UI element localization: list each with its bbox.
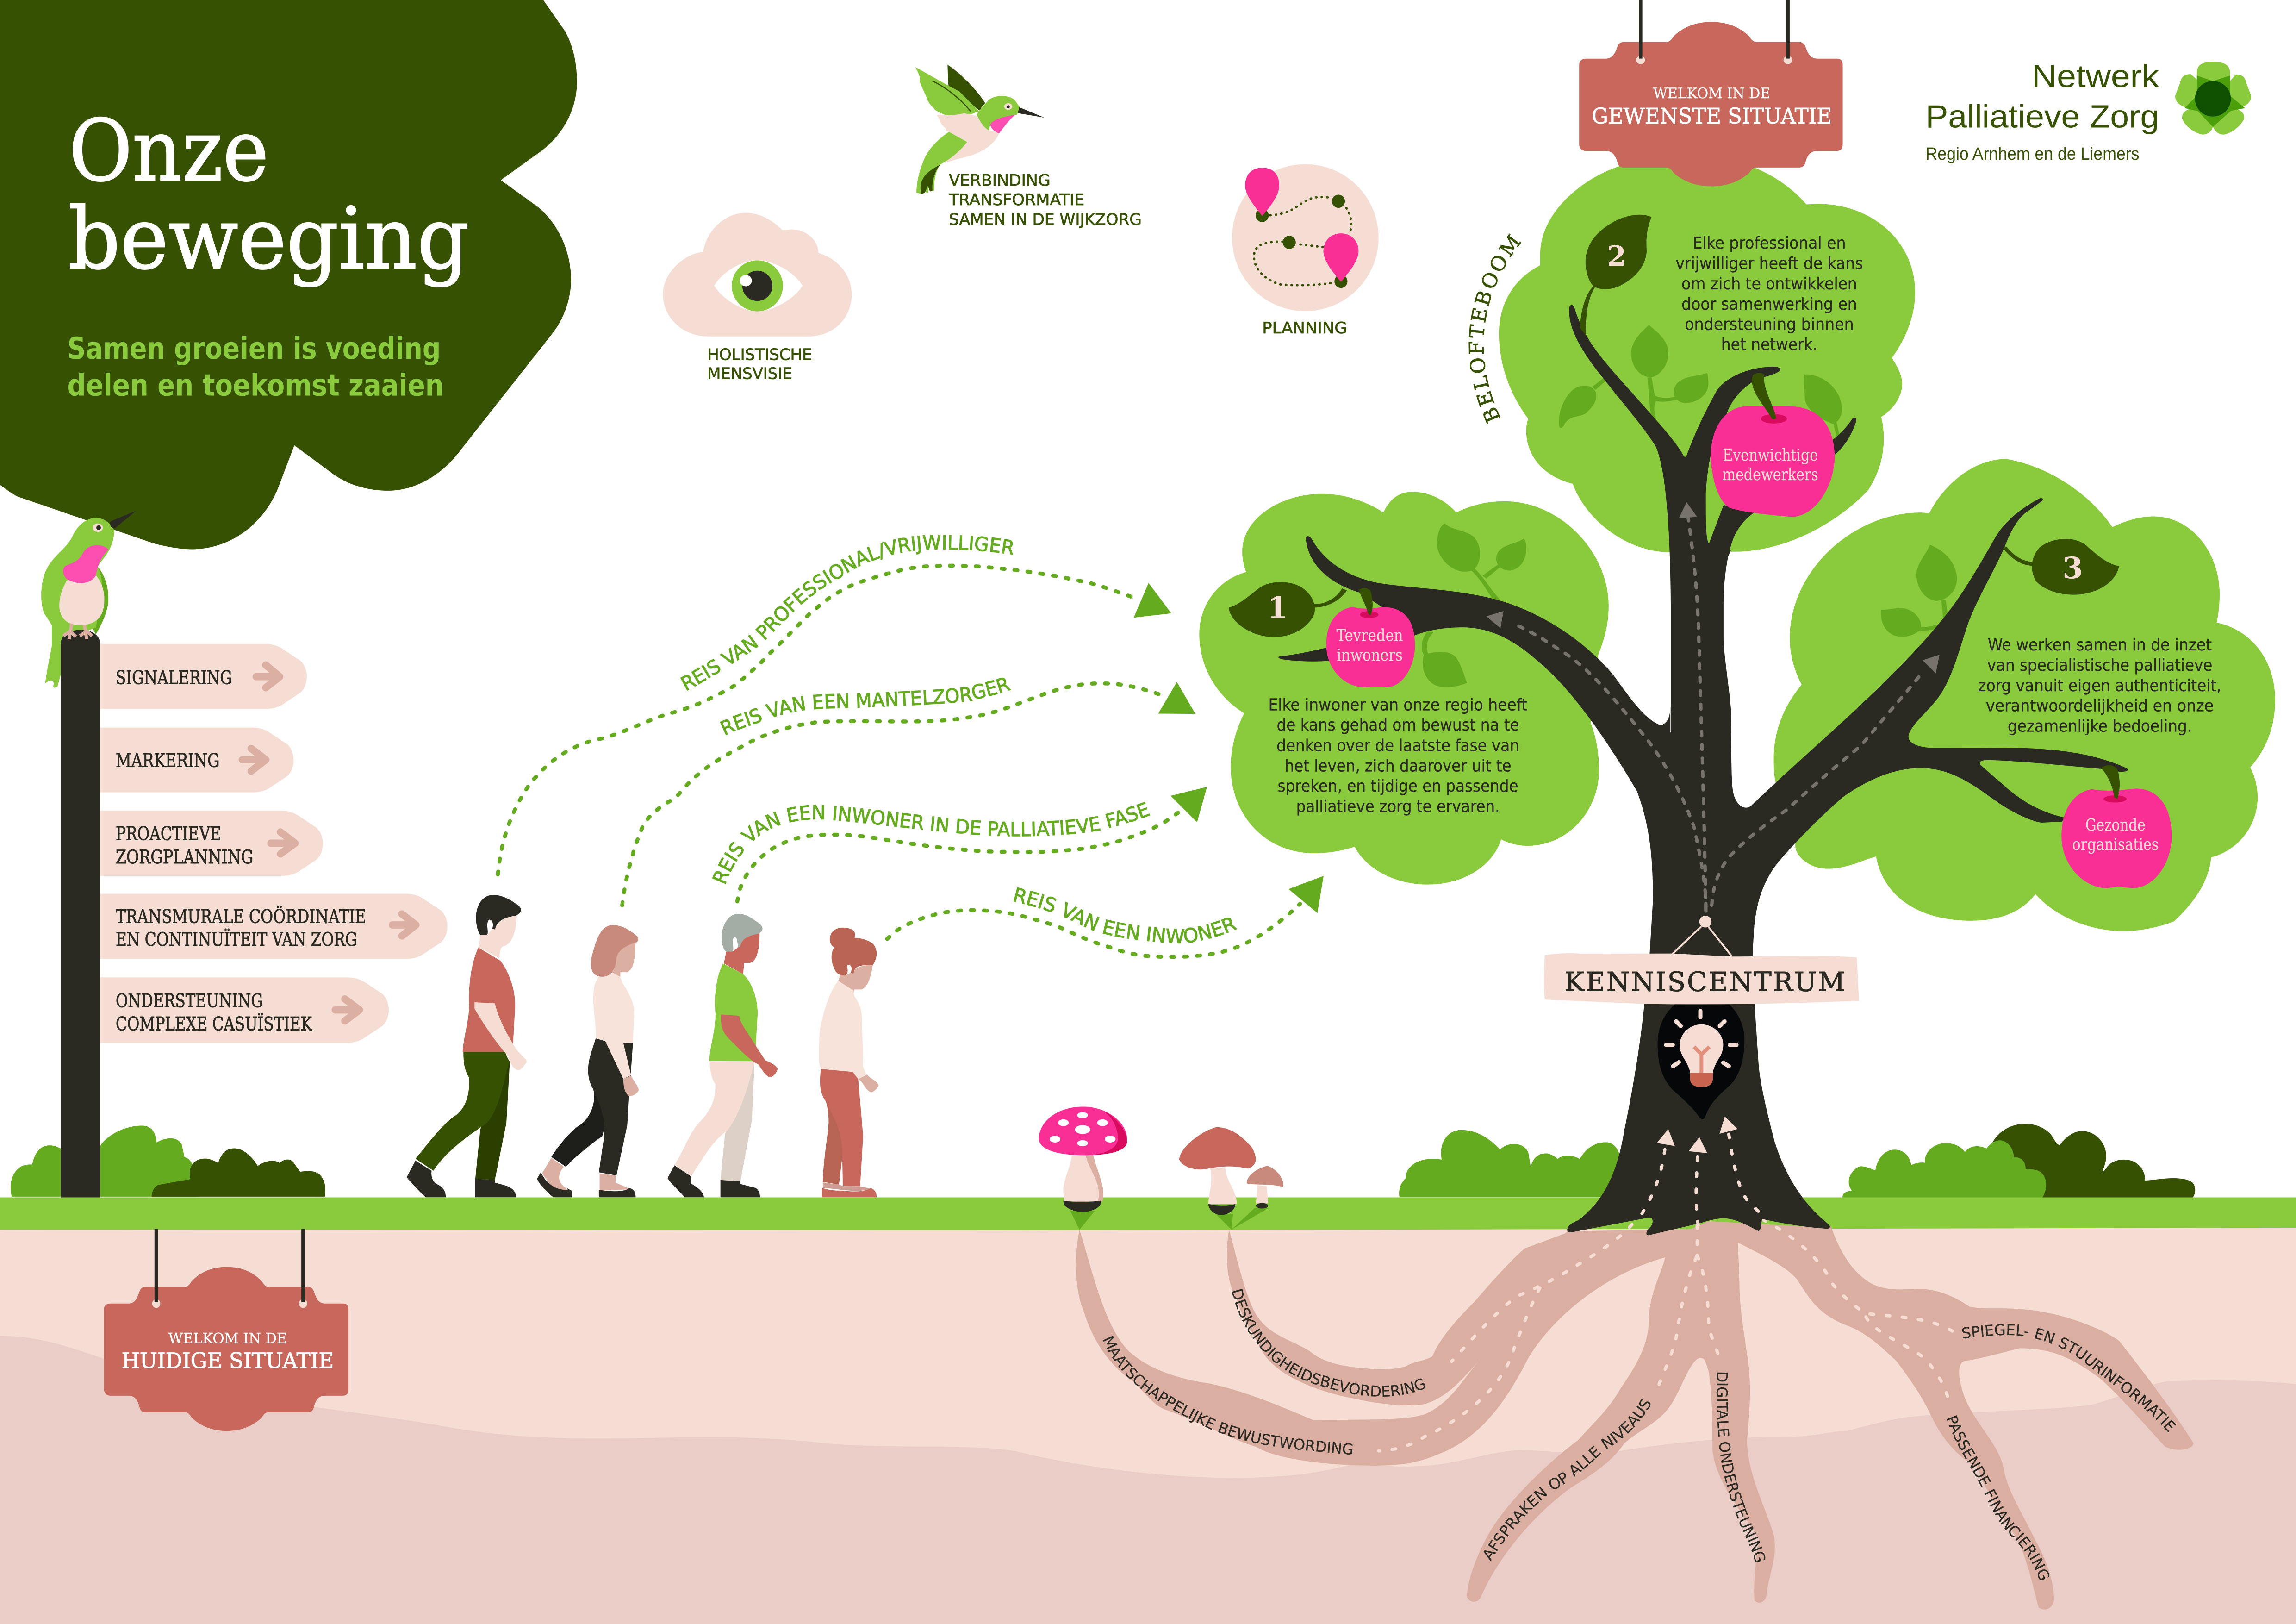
text block: promise 1: Elke inwoner van onze regio heeft bbox=[1269, 696, 1528, 715]
title: Onze bbox=[69, 102, 269, 200]
signpost bbox=[61, 624, 448, 1198]
apple label: Gezonde organisaties bbox=[2072, 816, 2159, 854]
text block: promise 1: spreken, en tijdige en passende bbox=[1278, 777, 1518, 796]
icon: flower bbox=[2175, 62, 2251, 135]
root labels: AFSPRAKEN OP ALLE NIVEAUS bbox=[1479, 1396, 1655, 1563]
caption: holistische mensvisie: HOLISTISCHE bbox=[707, 346, 812, 364]
hanging sign: gewenste situatie: WELKOM IN DE bbox=[1653, 85, 1770, 102]
sign: signalering bbox=[100, 644, 307, 709]
root labels: MAATSCHAPPELIJKE BEWUSTWORDING bbox=[1099, 1333, 1354, 1458]
text block: promise 2: vrijwilliger heeft de kans bbox=[1675, 254, 1863, 273]
curved heading: beloofteboom: BELOFTEBOOM bbox=[1465, 231, 1526, 426]
sign: proactieve zorgplanning bbox=[100, 811, 323, 876]
apples and leaves with numbers on tree crown 1 bbox=[1229, 582, 1415, 687]
bushes left of the signpost bbox=[11, 1125, 325, 1197]
post bbox=[61, 630, 100, 1198]
sign: ondersteuning complexe casuistiek: COMPLEXE CASUÏSTIEK bbox=[116, 1014, 312, 1035]
mushrooms bbox=[1039, 1106, 1283, 1230]
person 2: woman in cream blouse bbox=[537, 925, 639, 1197]
caption: verbinding transformatie samen in de wijkzorg: VERBINDING bbox=[949, 171, 1051, 190]
apple label: Tevreden inwoners: Tevreden bbox=[1337, 626, 1403, 645]
apple and numbered leaf on tree crown 3 bbox=[2003, 539, 2172, 888]
person 3: older person in green shirt bbox=[667, 914, 778, 1197]
icon: flying hummingbird bbox=[915, 65, 1045, 194]
apple label: Tevreden inwoners bbox=[1337, 626, 1403, 665]
branch 1 bbox=[1278, 536, 1670, 926]
hanging sign: gewenste situatie: GEWENSTE SITUATIE bbox=[1592, 104, 1832, 129]
root labels: PASSENDE FINANCIERING bbox=[1942, 1413, 2053, 1583]
sign: markering: MARKERING bbox=[116, 750, 220, 771]
text block: promise 3: verantwoordelijkheid en onze bbox=[1986, 696, 2214, 715]
caption: verbinding transformatie samen in de wijkzorg bbox=[948, 171, 1142, 229]
apple label: Evenwichtige medewerkers: medewerkers bbox=[1723, 465, 1818, 484]
icon: light bulb in knothole bbox=[1658, 1004, 1744, 1119]
logo: netwerk palliatieve zorg: Regio Arnhem en de Liemers bbox=[1926, 144, 2139, 164]
subtitle: Samen groeien is voeding bbox=[68, 331, 441, 366]
bird feet bbox=[63, 624, 92, 639]
sign: proactieve zorgplanning: ZORGPLANNING bbox=[116, 847, 253, 868]
bushes right of the trunk bbox=[1842, 1124, 2195, 1198]
root-to-trunk arrows bbox=[1640, 1117, 1767, 1229]
title panel: dark green cloud bbox=[0, 0, 577, 549]
caption: planning: PLANNING bbox=[1262, 319, 1347, 337]
icon: hummingbird on post bbox=[41, 511, 136, 688]
person 1: man in red shirt bbox=[407, 895, 527, 1197]
branch 2 bbox=[1569, 305, 1856, 602]
text block: promise 2: het netwerk. bbox=[1721, 335, 1817, 354]
sign: transmurale coordinatie: TRANSMURALE COÖRDINATIE bbox=[116, 906, 366, 927]
caption: holistische mensvisie: MENSVISIE bbox=[707, 365, 792, 383]
grass strip bbox=[0, 1198, 2296, 1230]
journey arrow: professional/vrijwilliger bbox=[498, 531, 1171, 874]
hanging sign: huidige situatie: HUIDIGE SITUATIE bbox=[122, 1348, 334, 1373]
journey arrow: mantelzorger bbox=[622, 673, 1195, 905]
icon: planning route bbox=[1232, 164, 1379, 311]
person 4: woman with hair bun bbox=[819, 928, 878, 1197]
text block: promise 1: de kans gehad om bewust na te bbox=[1277, 716, 1519, 735]
icon: eye in cloud bbox=[663, 213, 852, 337]
branch 3 bbox=[1694, 498, 2128, 960]
caption: verbinding transformatie samen in de wijkzorg: SAMEN IN DE WIJKZORG bbox=[949, 210, 1142, 229]
caption: verbinding transformatie samen in de wijkzorg: TRANSFORMATIE bbox=[948, 191, 1084, 209]
sign: ondersteuning complexe casuistiek: ONDERSTEUNING bbox=[116, 991, 263, 1012]
soil background bbox=[0, 1223, 2296, 1624]
kenniscentrum label: KENNISCENTRUM bbox=[1565, 967, 1845, 997]
text block: promise 2: ondersteuning binnen bbox=[1685, 315, 1854, 334]
root labels bbox=[1099, 1287, 2179, 1583]
roots bbox=[1076, 1219, 2194, 1610]
root labels: DESKUNDIGHEIDSBEVORDERING bbox=[1228, 1287, 1428, 1400]
sign: markering bbox=[100, 728, 293, 793]
tree crown 2 bbox=[1499, 166, 1915, 552]
logo: netwerk palliatieve zorg bbox=[1926, 58, 2251, 164]
number 1: 1 bbox=[1267, 591, 1288, 625]
apple label: Gezonde organisaties: organisaties bbox=[2072, 835, 2159, 854]
tree crown 1 bbox=[1199, 492, 1609, 885]
root labels: SPIEGEL- EN STUURINFORMATIE bbox=[1960, 1321, 2179, 1435]
journey arrow: inwoner bbox=[887, 876, 1324, 957]
dashed growth arrows in the tree bbox=[1486, 502, 1940, 911]
kenniscentrum sign and light bulb bbox=[1544, 916, 1859, 1229]
sign: signalering: SIGNALERING bbox=[116, 668, 232, 689]
sign: ondersteuning complexe casuistiek bbox=[100, 977, 389, 1043]
text block: promise 2: Elke professional en bbox=[1692, 234, 1846, 253]
sign: proactieve zorgplanning: PROACTIEVE bbox=[116, 824, 221, 845]
journey arrow: inwoner in de palliatieve fase: REIS VAN EEN INWONER IN DE PALLIATIEVE FASE bbox=[708, 798, 1152, 887]
text block: promise 3 bbox=[1978, 636, 2221, 736]
tree crown 3 bbox=[1774, 459, 2275, 931]
logo: netwerk palliatieve zorg: Netwerk bbox=[2032, 58, 2159, 94]
text block: promise 1: het leven, zich daarover uit te bbox=[1285, 756, 1511, 775]
caption: holistische mensvisie bbox=[707, 346, 812, 383]
text block: promise 1 bbox=[1269, 696, 1528, 816]
text block: promise 1: denken over de laatste fase van bbox=[1276, 736, 1519, 755]
text block: promise 3: We werken samen in de inzet bbox=[1988, 636, 2212, 655]
subtitle: delen en toekomst zaaien bbox=[68, 368, 444, 403]
number 3: 3 bbox=[2062, 551, 2083, 585]
text block: promise 3: gezamenlijke bedoeling. bbox=[2008, 717, 2192, 736]
hanging sign: huidige situatie: WELKOM IN DE bbox=[168, 1330, 287, 1347]
bush next to the trunk bbox=[1399, 1130, 1624, 1197]
logo: netwerk palliatieve zorg: Palliatieve Zorg bbox=[1926, 98, 2159, 134]
journey arrow: inwoner: REIS VAN EEN INWONER bbox=[1011, 883, 1239, 948]
number 2: 2 bbox=[1607, 240, 1626, 273]
text block: promise 2: door samenwerking en bbox=[1681, 295, 1857, 314]
subtitle bbox=[68, 331, 444, 403]
journey arrow: inwoner in de palliatieve fase bbox=[708, 787, 1207, 901]
text block: promise 3: zorg vanuit eigen authenticiteit, bbox=[1978, 676, 2221, 695]
title: beweging bbox=[68, 190, 469, 288]
root labels: DIGITALE ONDERSTEUNING bbox=[1713, 1371, 1769, 1565]
title bbox=[68, 102, 469, 288]
apple label: Gezonde organisaties: Gezonde bbox=[2085, 816, 2146, 835]
sign: transmurale coordinatie bbox=[100, 894, 448, 959]
tree: trunk and branches bbox=[1278, 305, 2128, 1235]
text block: promise 2: om zich te ontwikkelen bbox=[1681, 275, 1857, 294]
apple and numbered leaf on tree crown 2 bbox=[1580, 215, 1835, 517]
text block: promise 2 bbox=[1675, 234, 1863, 354]
journey arrow: mantelzorger: REIS VAN EEN MANTELZORGER bbox=[717, 673, 1013, 740]
sign: transmurale coordinatie: EN CONTINUÏTEIT VAN ZORG bbox=[116, 929, 357, 950]
text block: promise 1: palliatieve zorg te ervaren. bbox=[1296, 797, 1500, 816]
text block: promise 3: van specialistische palliatieve bbox=[1987, 656, 2212, 675]
apple label: Evenwichtige medewerkers: Evenwichtige bbox=[1723, 446, 1818, 465]
trunk base bbox=[1567, 898, 1830, 1235]
hanging sign: gewenste situatie bbox=[1579, 0, 1843, 187]
hanging sign: huidige situatie bbox=[104, 1229, 348, 1431]
journey arrow: professional/vrijwilliger: REIS VAN PROFESSIONAL/VRIJWILLIGER bbox=[677, 531, 1016, 695]
apple label: Evenwichtige medewerkers bbox=[1723, 446, 1818, 484]
apple label: Tevreden inwoners: inwoners bbox=[1337, 646, 1403, 665]
